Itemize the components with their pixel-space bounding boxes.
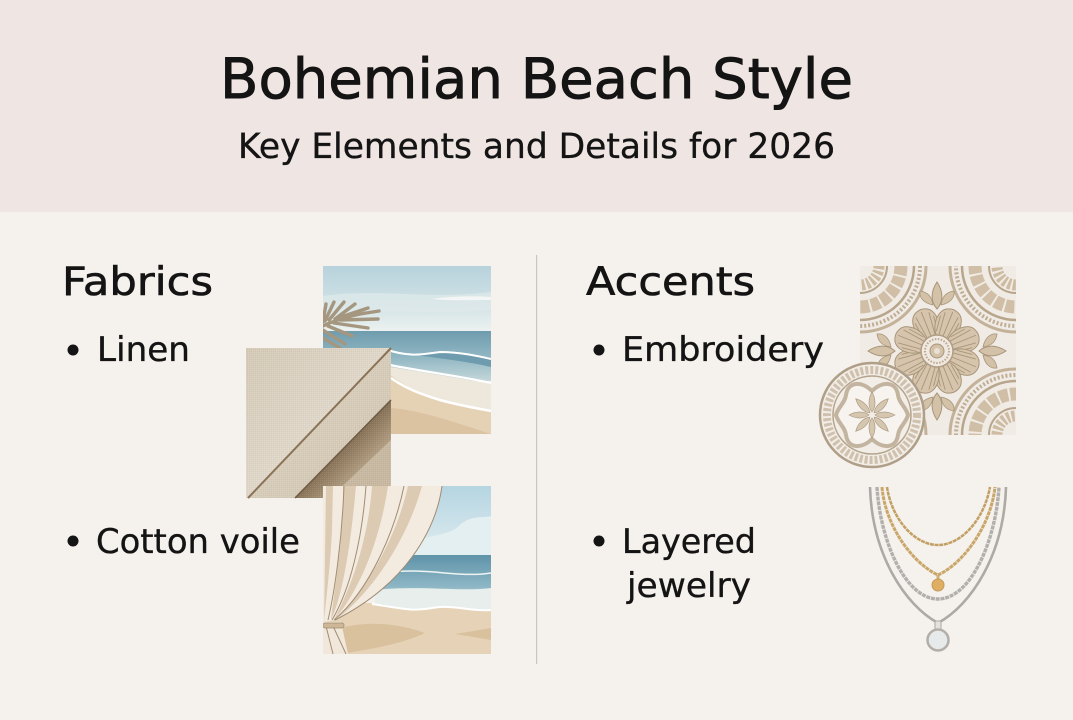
necklace: outer silver: [870, 487, 1006, 623]
header band: [0, 0, 1073, 212]
image: embroidered medallion: [820, 363, 924, 467]
list item: embroidery: Embroidery: [622, 330, 824, 370]
heading: accents: Accents: [586, 260, 755, 305]
image: beach with palm: [323, 266, 491, 434]
panel: fabrics: [62, 260, 491, 654]
list item: cotton voile: Cotton voile: [96, 522, 300, 562]
panel: accents: [586, 266, 1016, 652]
list item: linen: Linen: [97, 330, 190, 370]
necklace: silver chain: [877, 487, 999, 599]
heading: fabrics: Fabrics: [62, 260, 213, 305]
list item: layered jewelry: Layered: [622, 522, 756, 562]
pendant: gold: [932, 575, 944, 591]
title: Bohemian Beach Style: [220, 47, 853, 111]
necklace: short gold chain: [887, 487, 990, 545]
divider: [536, 255, 537, 664]
subtitle: Key Elements and Details for 2026: [238, 127, 835, 167]
list item: layered jewelry: [594, 522, 756, 606]
pendant: pearl: [928, 621, 948, 650]
image: linen swatch: [246, 348, 391, 498]
necklace: gold chain with pendant: [882, 487, 995, 575]
image: embroidery tile: [860, 266, 1016, 435]
image: curtain and beach: [323, 486, 491, 654]
list item: layered jewelry: jewelry: [626, 566, 751, 606]
image: layered necklaces: [870, 487, 1006, 650]
